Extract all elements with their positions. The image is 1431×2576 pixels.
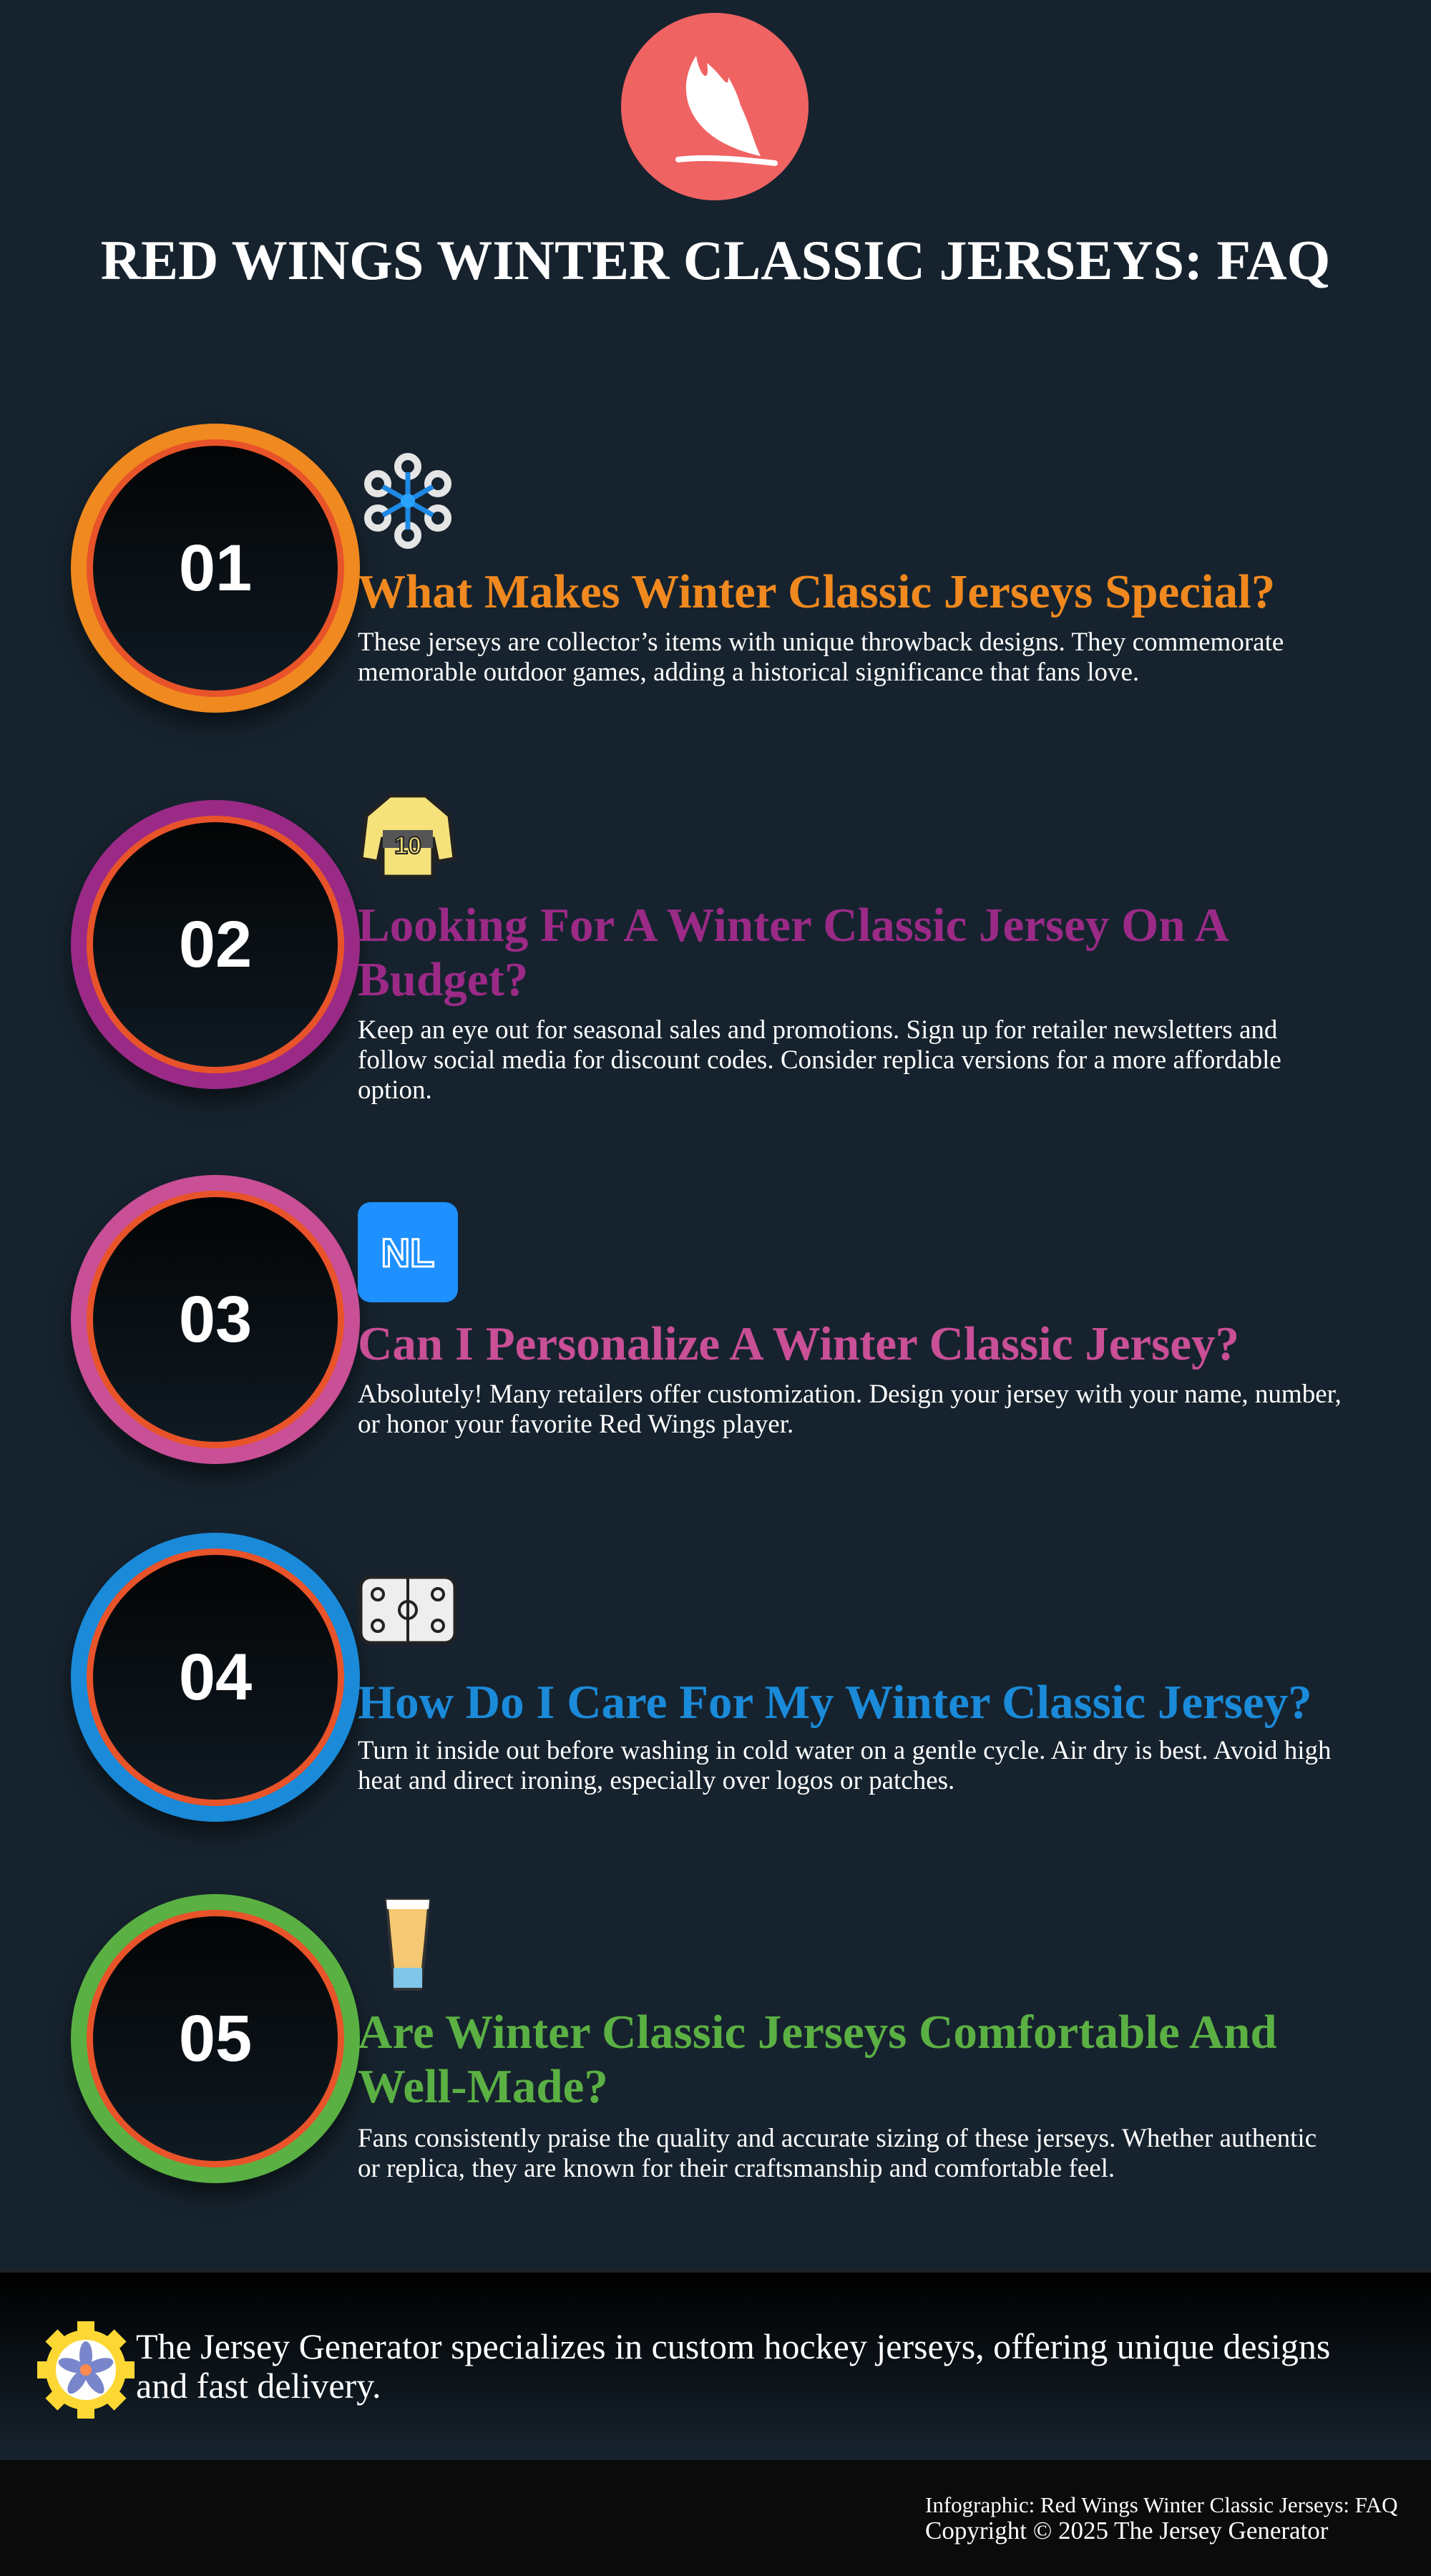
title: RED WINGS WINTER CLASSIC JERSEYS: FAQ <box>101 229 1330 291</box>
text 03: Absolutely! Many retailers offer customization. Design your jersey with your name, number, <box>358 1380 1342 1409</box>
heading 02: Budget? <box>358 953 528 1006</box>
footer text <box>136 2326 1330 2406</box>
text 02 <box>358 1015 1281 1105</box>
text 03: or honor your favorite Red Wings player. <box>358 1410 793 1439</box>
text 02: option. <box>358 1075 432 1105</box>
number circle 04 <box>71 1533 360 1822</box>
heading 03: Can I Personalize A Winter Classic Jersey? <box>358 1317 1239 1370</box>
credits: Copyright © 2025 The Jersey Generator <box>925 2517 1328 2545</box>
number circle 04: 04 <box>179 1640 252 1713</box>
bottom bar <box>0 2460 1431 2576</box>
icon: gear <box>37 2321 135 2419</box>
text 04: Turn it inside out before washing in cold water on a gentle cycle. Air dry is best. Avoid high <box>358 1736 1332 1765</box>
icon: jersey: 10 <box>394 832 421 859</box>
credits: Infographic: Red Wings Winter Classic Jerseys: FAQ <box>925 2492 1397 2517</box>
footer text: and fast delivery. <box>136 2366 381 2406</box>
text 02: follow social media for discount codes. Consider replica versions for a more affordable <box>358 1045 1281 1075</box>
icon: NL badge: NL <box>381 1229 434 1275</box>
footer text: The Jersey Generator specializes in custom hockey jerseys, offering unique designs <box>136 2326 1330 2366</box>
heading 02 <box>358 899 1229 1006</box>
text 02: Keep an eye out for seasonal sales and promotions. Sign up for retailer newsletters and <box>358 1015 1277 1045</box>
heading 05 <box>358 2006 1277 2113</box>
footer band <box>0 2270 1431 2460</box>
text 04: heat and direct ironing, especially over logos or patches. <box>358 1766 954 1795</box>
number circle 02: 02 <box>179 907 252 980</box>
text 04 <box>358 1736 1332 1795</box>
icon: snowflake <box>364 453 451 549</box>
text 05 <box>358 2124 1317 2183</box>
icon: hockey rink <box>359 1576 456 1644</box>
logo: feather circle <box>621 13 809 200</box>
text 01: These jerseys are collector’s items with unique throwback designs. They commemorate <box>358 628 1284 657</box>
heading 04: How Do I Care For My Winter Classic Jersey? <box>358 1676 1312 1729</box>
text 05: or replica, they are known for their craftsmanship and comfortable feel. <box>358 2154 1115 2183</box>
heading 05: Well-Made? <box>358 2060 608 2113</box>
number circle 03: 03 <box>179 1282 252 1355</box>
number circle 01: 01 <box>179 531 252 604</box>
icon: NL badge <box>358 1202 458 1302</box>
icon: jersey <box>359 794 456 879</box>
text 03 <box>358 1380 1342 1439</box>
heading 05: Are Winter Classic Jerseys Comfortable And <box>358 2006 1277 2059</box>
heading 02: Looking For A Winter Classic Jersey On A <box>358 899 1229 952</box>
icon: beer glass <box>385 1898 431 1991</box>
text 05: Fans consistently praise the quality and accurate sizing of these jerseys. Whether authentic <box>358 2124 1317 2153</box>
number circle 05: 05 <box>179 2002 252 2075</box>
heading 01: What Makes Winter Classic Jerseys Special? <box>358 565 1275 618</box>
number circle 02 <box>71 800 360 1089</box>
text 01: memorable outdoor games, adding a historical significance that fans love. <box>358 658 1139 687</box>
number circle 01 <box>71 424 360 713</box>
number circle 05 <box>71 1894 360 2183</box>
credits <box>925 2492 1397 2545</box>
number circle 03 <box>71 1175 360 1464</box>
text 01 <box>358 628 1284 687</box>
